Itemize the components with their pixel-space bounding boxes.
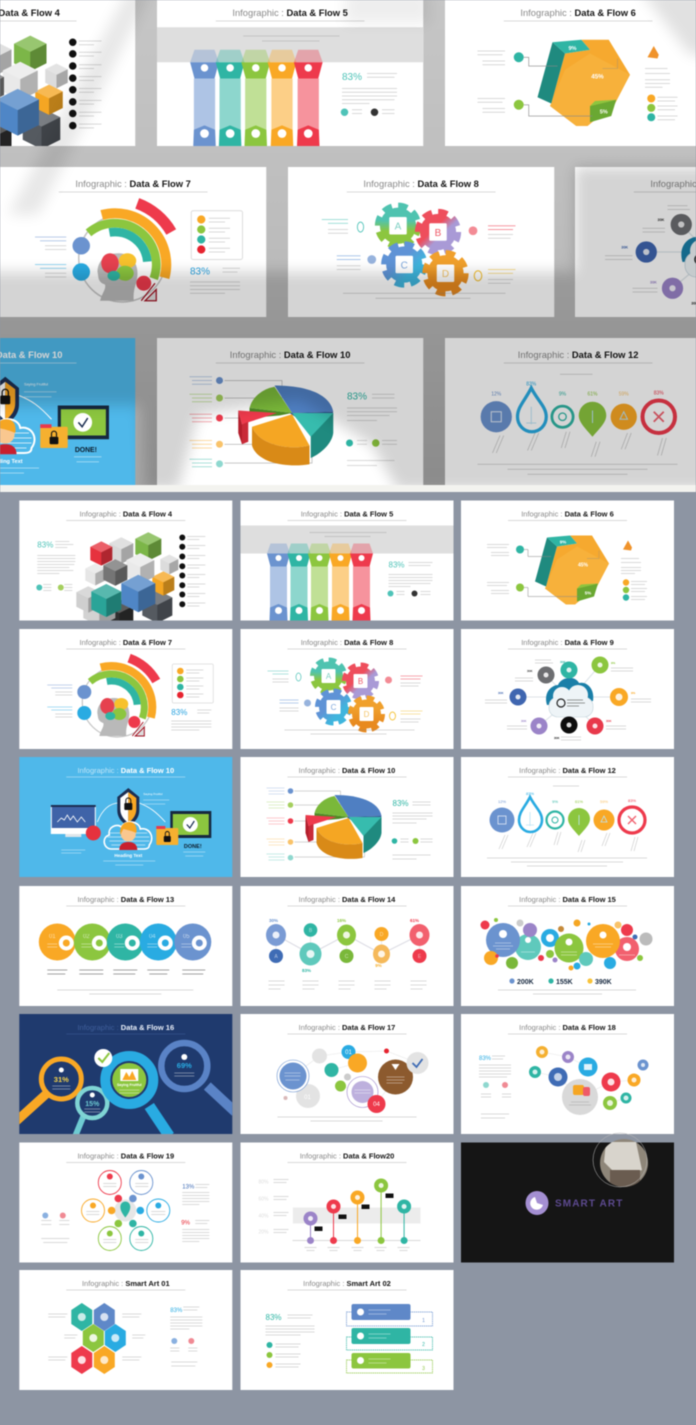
thin ring <box>593 1133 647 1187</box>
title: Infographic : Data & Flow 12 <box>519 766 616 775</box>
infographic: security: Heading Text <box>114 853 143 858</box>
title: Infographic : Data & Flow 10 <box>77 766 174 775</box>
stat row: 155K <box>556 979 573 986</box>
title: Infographic : Data & Flow 17 <box>299 1023 395 1032</box>
stats column <box>266 1313 314 1368</box>
title: Infographic : Data & Flow 6 <box>521 510 614 518</box>
panel: slide Data & Flow 17 <box>240 1014 454 1134</box>
stat column <box>479 1056 511 1118</box>
connected node chart: E <box>418 954 422 960</box>
panel: slide Data & Flow 5 <box>240 500 454 620</box>
infographic: ribbons <box>157 21 423 146</box>
panel: slide Data & Flow 19 <box>19 1142 232 1262</box>
connected node chart <box>266 918 430 973</box>
stats column: 83% <box>266 1313 282 1322</box>
stacked labelled bars: 3 <box>422 1366 425 1372</box>
connected node chart: D <box>380 932 384 938</box>
background: photographed top area <box>0 0 696 490</box>
infographic: drops: 61% <box>575 799 583 804</box>
infographic: 3D cubes: 83% <box>37 540 53 550</box>
infographic: cloud hub <box>605 192 696 306</box>
infographic: gears: D <box>364 710 370 719</box>
infographic: gears: C <box>331 703 337 712</box>
infographic: drops <box>478 363 678 474</box>
connected node chart: B <box>309 928 313 934</box>
panel: slide Data & Flow20 <box>240 1142 454 1262</box>
infographic: drops: 83% <box>526 791 534 796</box>
infographic: 3D block: 45% <box>578 562 589 568</box>
stats: 83% <box>170 1308 183 1314</box>
chain of circles: 01 <box>49 934 56 940</box>
logo circle <box>526 1191 548 1215</box>
magnifiers <box>15 1034 235 1136</box>
infographic: 3D block <box>487 520 647 604</box>
panel: slide Data & Flow 4 <box>19 500 232 630</box>
lollipop chart: 40% <box>258 1214 269 1220</box>
panel: slide Smart Art 01 <box>19 1270 232 1390</box>
infographic: ribbons <box>240 520 454 620</box>
infographic: cloud hub: 30K <box>554 736 560 740</box>
magnifiers: Saying Fruitful <box>117 1083 142 1087</box>
infographic: cloud hub: 9% <box>631 691 636 695</box>
stacked labelled bars: 1 <box>422 1318 425 1324</box>
infographic: drops: 9% <box>552 799 558 804</box>
infographic: head with arcs <box>35 192 242 302</box>
panel: top slide Data & Flow 6 <box>445 0 696 146</box>
title: Infographic : Data & Flow 12 <box>518 350 638 360</box>
infographic: cloud hub <box>485 649 651 740</box>
panel: top slide Data & Flow 10 blue <box>0 338 135 488</box>
bubble cluster <box>480 918 652 970</box>
title: Infographic : Data & Flow 10 <box>299 766 395 775</box>
title: Infographic : Data & Flow 19 <box>77 1152 174 1160</box>
connected node chart: 61% <box>410 918 419 923</box>
panel: top slide Data & Flow 4 <box>0 0 135 158</box>
infographic: head with arcs: 83% <box>171 708 187 717</box>
title: Infographic : Data & Flow 15 <box>519 895 616 904</box>
lollipop chart <box>258 1178 420 1250</box>
connected node chart: 30% <box>269 918 278 923</box>
stats: 9% <box>181 1220 191 1226</box>
cover photo circle <box>599 1138 649 1188</box>
title: Infographic : Data & Flow 7 <box>80 638 172 647</box>
chain of circles: 05 <box>183 934 190 940</box>
icon bubbles <box>529 1046 648 1115</box>
infographic: 3D pie: 83% <box>392 799 409 808</box>
panel: top slide Data & Flow 7 <box>0 167 266 317</box>
infographic: cloud hub: 30K <box>527 669 533 673</box>
bubble network: 01 <box>304 1095 311 1101</box>
title: Infographic : Data & Flow 14 <box>299 895 396 904</box>
panel: slide Data & Flow 18 <box>461 1014 674 1134</box>
infographic: gears <box>322 192 516 298</box>
window light shadow overlay <box>0 0 696 490</box>
infographic: head with arcs <box>47 649 213 737</box>
infographic: security: DONE! <box>184 844 202 850</box>
captions <box>47 970 205 974</box>
title: Infographic : Smart Art 02 <box>303 1279 391 1288</box>
panel: top slide Data & Flow 10 pie <box>157 338 423 488</box>
infographic: 3D pie <box>190 363 397 467</box>
infographic: security <box>51 777 211 865</box>
cover title: SMART ART <box>555 1198 623 1210</box>
panel: slide Smart Art 02 <box>240 1270 454 1390</box>
bubble network: 01 <box>345 1050 352 1056</box>
panel: top slide Data & Flow 9 <box>575 167 696 317</box>
title: Infographic : Data & Flow 5 <box>301 510 393 518</box>
infographic: drops: 59% <box>600 799 608 804</box>
infographic: drops: 12% <box>498 799 506 804</box>
panel: slide Data & Flow 13 <box>19 886 232 1006</box>
connected node chart: A <box>274 954 278 960</box>
connected node chart: 16% <box>337 918 346 923</box>
connected node chart: 83% <box>302 968 311 973</box>
title: Infographic : Data & Flow 9 <box>521 638 614 647</box>
panel: slide Data & Flow 6 <box>461 500 674 620</box>
infographic: cloud hub: 9% <box>611 661 616 665</box>
panel: slide Data & Flow 12 <box>461 757 674 877</box>
title: Infographic : Data & Flow20 <box>300 1152 394 1160</box>
title: Infographic : Data & Flow 13 <box>77 895 174 904</box>
chain of circles: 04 <box>149 934 156 940</box>
stat column: 83% <box>479 1056 492 1062</box>
infographic: 3D pie <box>266 777 432 860</box>
panel: slide Data & Flow 8 <box>240 629 454 749</box>
bubble network: 04 <box>373 1102 380 1108</box>
title: Infographic : Data & Flow 8 <box>363 179 479 189</box>
bubble network <box>277 1045 428 1113</box>
title: Infographic : Smart Art 01 <box>82 1279 170 1288</box>
panel: top slide Data & Flow 5 <box>157 0 423 146</box>
panel: slide Data & Flow 10 blue <box>19 757 232 877</box>
infographic: cloud hub: 30K <box>521 719 527 723</box>
infographic: drops <box>487 777 647 866</box>
stats <box>170 1307 202 1366</box>
panel: slide Data & Flow 10 pie <box>240 757 454 877</box>
infographic: gears: A <box>326 672 332 681</box>
background: lower slide sheet <box>0 485 696 1425</box>
lollipop chart: 20% <box>258 1230 269 1236</box>
connected node chart: C <box>345 954 349 960</box>
title: Infographic : Data & Flow 16 <box>77 1023 174 1032</box>
title: Infographic : Data & Flow 6 <box>520 8 636 18</box>
title: Infographic : Data & Flow 5 <box>232 8 348 18</box>
panel: slide Data & Flow 7 <box>19 629 232 749</box>
panel: slide Data & Flow 9 <box>461 629 674 749</box>
stat row: 390K <box>595 979 612 986</box>
panel: top slide Data & Flow 12 <box>445 338 696 488</box>
stat row <box>509 978 612 986</box>
infographic: cloud hub: 30K <box>498 691 504 695</box>
infographic: 3D block: 9% <box>560 540 566 544</box>
infographic: drops: 83% <box>628 798 636 803</box>
magnifiers: 15% <box>85 1101 100 1108</box>
title: Infographic : Data & Flow 7 <box>75 179 191 189</box>
title: Infographic : Data & Flow 8 <box>301 638 393 647</box>
panel: slide Data & Flow 14 <box>240 886 454 1006</box>
infographic: gears <box>268 649 422 734</box>
chain of circles <box>39 924 211 960</box>
lollipop chart: 80% <box>258 1180 269 1186</box>
magnifiers: 69% <box>177 1061 192 1070</box>
title: Infographic : Data & Flow 10 <box>230 350 350 360</box>
panel: Smart Art cover slide <box>461 1133 674 1262</box>
infographic: security <box>0 363 109 473</box>
infographic: cloud hub: 30K <box>560 660 566 664</box>
title: Infographic : Data & Flow 18 <box>519 1023 616 1032</box>
infographic: gears: B <box>358 677 363 686</box>
petal diagram <box>82 1170 170 1250</box>
panel: slide Data & Flow 16 <box>15 1014 235 1136</box>
stats <box>41 1184 209 1242</box>
chain of circles: 03 <box>116 934 123 940</box>
stats: 13% <box>182 1184 195 1190</box>
connected node chart: 9% <box>375 963 382 968</box>
infographic: security: Saying Fruitful <box>143 792 163 796</box>
stat row: 200K <box>517 979 534 986</box>
panel: slide Data & Flow 15 <box>461 886 674 1006</box>
magnifiers: 31% <box>54 1075 69 1084</box>
panel: top slide Data & Flow 8 <box>288 167 554 317</box>
infographic: 3D cubes <box>0 21 102 158</box>
lollipop chart: 60% <box>258 1196 269 1202</box>
infographic: 3D block <box>478 21 678 126</box>
infographic: cloud hub: 30K <box>606 719 612 723</box>
chain of circles: 02 <box>83 934 90 940</box>
title: Infographic : Data & Flow 4 <box>80 510 173 518</box>
infographic: 3D block: 5% <box>585 590 591 596</box>
stacked labelled bars <box>346 1304 432 1373</box>
white divider band <box>0 485 696 492</box>
infographic: ribbons: 83% <box>388 560 405 570</box>
infographic: 3D cubes <box>36 520 205 630</box>
hexagon cluster <box>48 1303 145 1374</box>
stacked labelled bars: 2 <box>422 1342 425 1348</box>
